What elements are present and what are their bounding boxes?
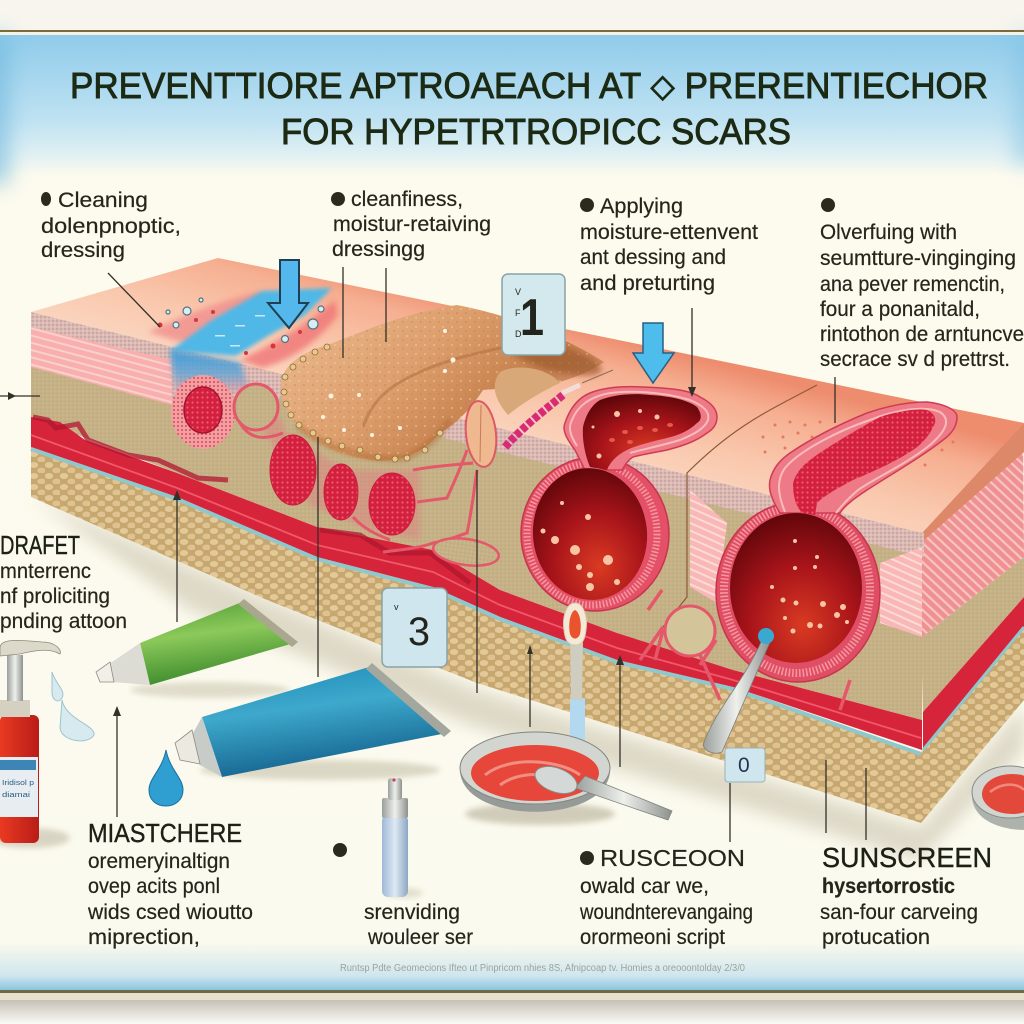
blue tube xyxy=(175,663,451,780)
label: applying xyxy=(580,195,758,295)
label: overturning xyxy=(820,198,1024,371)
badge 1: 1 xyxy=(520,289,544,347)
label: applying: Applying xyxy=(600,195,683,218)
right ointment dish xyxy=(972,766,1024,830)
pink fan 2 xyxy=(880,547,922,637)
textured tan patch xyxy=(495,368,560,415)
label: sunscreen xyxy=(820,842,992,949)
label: overturning: seumtture-vinginging xyxy=(820,247,1016,270)
label: srenviding xyxy=(333,843,473,949)
seam line xyxy=(663,385,817,627)
red vascular band xyxy=(31,417,922,750)
label: rusceoon: owald car we, xyxy=(580,875,709,898)
label: rusceoon: orormeoni script xyxy=(580,926,725,949)
right side face xyxy=(922,423,1024,637)
label: cleaning xyxy=(41,189,181,262)
label: srenviding: wouleer ser xyxy=(367,926,473,949)
pump bottle: diamai xyxy=(2,792,31,799)
label: rusceoon: woundnterevangaing xyxy=(579,901,753,924)
label: miastchere: ovep acits ponl xyxy=(88,875,220,898)
leader lines xyxy=(0,267,866,842)
blue drop xyxy=(149,750,183,806)
label: rusceoon xyxy=(579,845,753,949)
label: miastchere: miprection, xyxy=(88,926,200,949)
blue arrow 2 xyxy=(633,323,674,383)
label: overturning: Olverfuing with xyxy=(820,221,957,244)
scar mound xyxy=(281,305,605,462)
label: rusceoon: RUSCEOON xyxy=(600,845,745,871)
label: cleaning: Cleaning xyxy=(58,189,148,212)
skin cross-section block xyxy=(31,258,1024,823)
label: sunscreen: hysertorrostic xyxy=(822,875,955,898)
label: applying: and preturting xyxy=(580,272,715,295)
badge 3: 3 xyxy=(408,610,430,654)
badge 1: D xyxy=(515,329,522,339)
label: cleanfiness: cleanfiness, xyxy=(351,188,463,211)
label: cleanfiness: moistur-retaiving xyxy=(333,213,491,236)
pale drops xyxy=(52,672,94,741)
label: drafet: nf proliciting xyxy=(0,585,110,608)
label: srenviding: srenviding xyxy=(364,901,460,924)
label: drafet xyxy=(0,530,127,633)
label: overturning: four a ponanitald, xyxy=(820,298,980,321)
label: applying: moisture-ettenvent xyxy=(580,221,758,244)
badge 1: F xyxy=(515,308,521,318)
label: cleanfiness xyxy=(331,188,491,261)
label: overturning: ana pever remenctin, xyxy=(820,273,1005,296)
blue line xyxy=(31,449,921,754)
badge 0: 0 xyxy=(738,754,750,777)
title: PREVENTTIORE APTROAEACH AT ⬦ PRERENTIECHOR xyxy=(70,65,988,106)
central wound xyxy=(521,387,717,611)
label: cleaning: dolenpnoptic, xyxy=(41,215,181,238)
badge 3 xyxy=(382,588,447,667)
label: overturning: secrace sv d prettrst. xyxy=(820,348,1010,371)
label: overturning: rintothon de arntuncve xyxy=(820,323,1024,346)
fat layer xyxy=(31,447,1024,823)
label: miastchere: wids csed wioutto xyxy=(87,901,253,924)
dermis layer xyxy=(31,312,924,720)
badge 3: v xyxy=(394,602,399,612)
metal spatula xyxy=(703,628,774,753)
label: miastchere: oremeryinaltign xyxy=(88,850,230,873)
label: drafet: pnding attoon xyxy=(0,610,127,633)
vessels around wounds xyxy=(640,590,850,710)
small cysts left xyxy=(171,375,500,569)
pump bottle xyxy=(0,640,70,848)
green tube xyxy=(96,599,298,698)
block ground shadow xyxy=(31,497,1024,860)
label: sunscreen: protucation xyxy=(822,926,930,949)
epidermis stripes xyxy=(31,327,172,405)
water stream and spoon tip xyxy=(563,603,587,742)
badge 1: V xyxy=(515,287,521,297)
right wound xyxy=(716,402,957,682)
bowl with ointment and spoon xyxy=(460,732,672,825)
speckled upper band xyxy=(283,374,924,557)
label: sunscreen: san-four carveing xyxy=(820,901,978,924)
label: drafet: DRAFET xyxy=(0,530,80,560)
badge 0 xyxy=(725,748,765,782)
title xyxy=(70,65,988,152)
label: cleaning: dressing xyxy=(41,239,125,262)
label: cleanfiness: dressingg xyxy=(332,238,425,261)
pink fan 1 xyxy=(690,490,727,603)
title: FOR HYPETRTROPICC SCARS xyxy=(281,111,791,152)
badge 1 xyxy=(502,274,565,355)
applicator pen xyxy=(382,778,423,898)
follicle and magenta beads xyxy=(463,370,613,468)
cleansing blue patch xyxy=(148,288,338,396)
label: drafet: mnterrenc xyxy=(0,560,91,583)
label: miastchere xyxy=(87,818,253,949)
label: sunscreen: SUNSCREEN xyxy=(822,842,992,873)
skin top surface xyxy=(31,258,1024,533)
footnote: Runtsp Pdte Geomecions Ifteo ut Pinpricom nhies 8S, Afnipcoap tv. Homies a oreooontolday 2/3/0 xyxy=(340,963,745,974)
blue arrow 1 xyxy=(268,260,308,328)
pump bottle: Iridisol p xyxy=(2,780,34,787)
label: applying: ant dessing and xyxy=(580,246,726,269)
label: miastchere: MIASTCHERE xyxy=(88,818,242,848)
